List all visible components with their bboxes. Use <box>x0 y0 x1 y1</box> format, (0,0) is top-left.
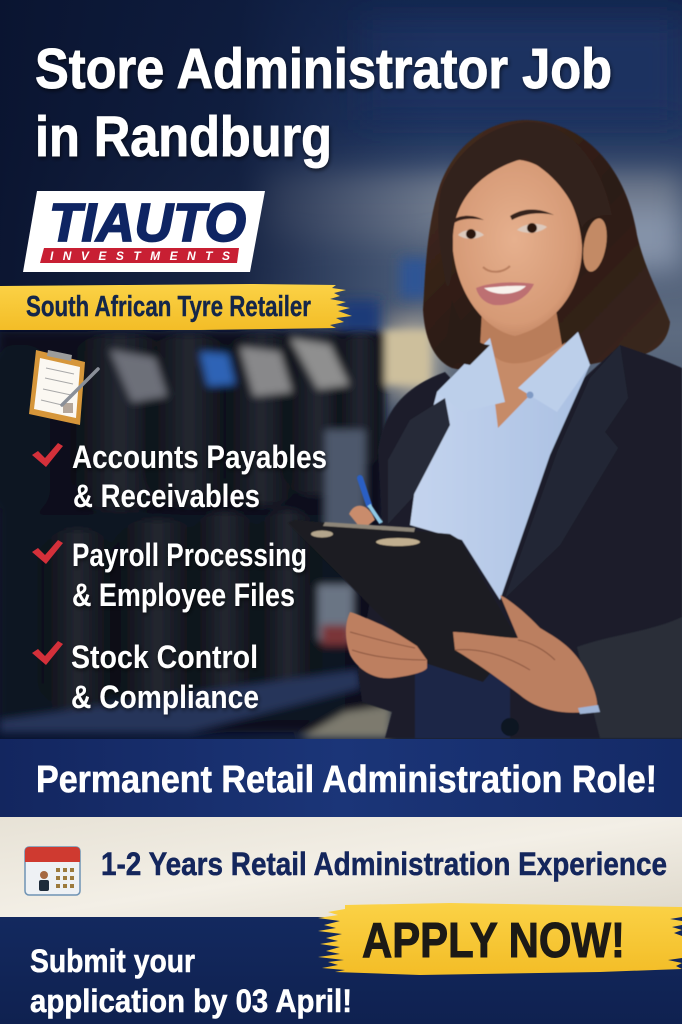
panel: deadline: application by 03 April! <box>30 983 352 1019</box>
shirt collar <box>437 332 590 412</box>
chest skin <box>488 342 566 428</box>
item: payroll processing: Payroll Processing <box>72 537 307 573</box>
left lapel <box>388 398 450 524</box>
panel: deadline: Submit your <box>30 943 195 979</box>
nose <box>483 266 510 272</box>
title: Store Administrator Job <box>35 37 612 101</box>
button: apply now: APPLY NOW! <box>362 914 625 968</box>
hair back <box>423 120 670 374</box>
left hand holding pen <box>349 506 375 530</box>
banner: South African Tyre Retailer <box>0 284 352 330</box>
item: accounts payables: & Receivables <box>73 478 260 514</box>
dress under clipboard <box>415 660 510 738</box>
banner: South African Tyre Retailer: South African Tyre Retailer <box>26 291 311 323</box>
right hand over clipboard <box>453 595 597 713</box>
background: blurred warehouse <box>0 0 682 740</box>
eyes and brows <box>454 209 554 239</box>
item: payroll processing: & Employee Files <box>72 577 295 613</box>
right lapel <box>505 345 628 598</box>
neck and chest <box>478 310 562 425</box>
black clipboard <box>288 520 518 682</box>
item: stock control: & Compliance <box>71 679 259 715</box>
right sleeve <box>577 617 682 738</box>
panel: experience <box>0 817 682 920</box>
ear <box>579 217 611 273</box>
title: in Randburg <box>35 105 332 169</box>
item: stock control <box>32 639 259 715</box>
logo: Tiauto Investments: INVESTMENTS <box>50 249 230 263</box>
shirt <box>410 332 590 600</box>
panel: deadline <box>0 917 682 1024</box>
background: blurred tyre racks <box>0 330 430 738</box>
checklist <box>32 439 327 715</box>
button: apply now <box>318 903 682 975</box>
smiling mouth <box>476 282 534 305</box>
band: permanent role <box>0 739 682 817</box>
logo: Tiauto Investments <box>23 191 265 272</box>
logo: Tiauto Investments: TIAUTO <box>49 193 246 253</box>
icon: clipboard with document and pen <box>29 350 98 425</box>
jacket <box>358 345 682 738</box>
item: payroll processing <box>32 537 307 613</box>
face <box>452 160 582 336</box>
blue pen <box>360 478 381 523</box>
item: accounts payables <box>32 439 327 514</box>
person: smiling businesswoman with clipboard <box>288 120 682 738</box>
hair fringe <box>438 122 612 286</box>
left hand under clipboard <box>346 612 427 678</box>
item: accounts payables: Accounts Payables <box>72 439 327 475</box>
item: stock control: Stock Control <box>71 639 258 675</box>
icon: calendar with person <box>25 847 80 895</box>
title <box>35 37 612 169</box>
